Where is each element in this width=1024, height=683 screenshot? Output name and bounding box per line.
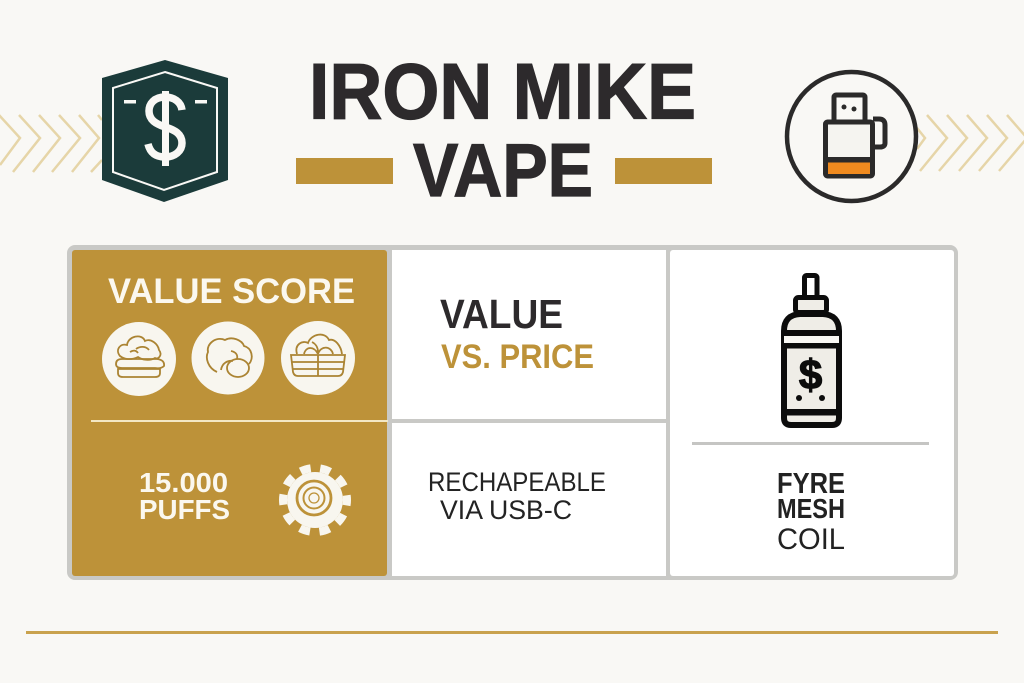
icon: gear [283, 468, 347, 532]
panel: value vs price: VS. PRICE [441, 338, 594, 376]
heading: value score: VALUE SCORE [108, 272, 355, 311]
icon: circle three [281, 321, 355, 395]
panel: value vs price [392, 250, 666, 419]
text: fyre mesh coil: MESH [777, 493, 845, 524]
icon: circle two [192, 322, 264, 394]
panel: rechargeable: VIA USB-C [440, 495, 572, 525]
panel: rechargeable: RECHAPEABLE [428, 467, 606, 497]
icon: circle one [102, 322, 176, 396]
panel: value vs price: VALUE [440, 291, 563, 337]
icon: dollar shield [102, 60, 228, 202]
panel: rechargeable [392, 423, 666, 576]
panel: comparison table [69, 247, 956, 578]
icon: bottle [784, 276, 839, 425]
panel: coil [670, 250, 954, 576]
icon: usb battery in circle [787, 72, 916, 201]
text: fyre mesh coil: COIL [777, 523, 845, 556]
text: fyre mesh coil: FYRE [777, 468, 845, 500]
title: Iron Mike Vape: IRON MIKE [309, 46, 696, 136]
icon: bottle: $ [799, 351, 822, 398]
text: puffs [139, 467, 230, 525]
text: fyre mesh coil [777, 468, 845, 556]
title: Iron Mike Vape: VAPE [413, 128, 593, 212]
text: puffs: 15.000 [139, 467, 228, 498]
title: Iron Mike Vape [296, 46, 712, 212]
text: puffs: PUFFS [139, 494, 230, 525]
panel: gold value column [72, 250, 388, 576]
